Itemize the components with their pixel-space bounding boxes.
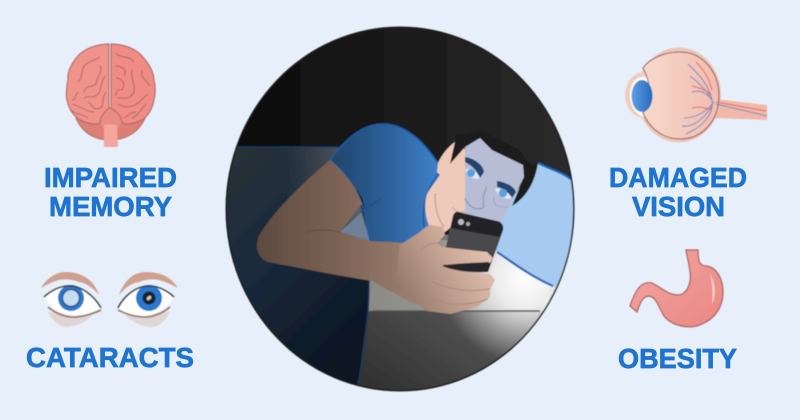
right pupil	[142, 292, 156, 304]
retina veins red	[692, 62, 766, 111]
collar neck edge	[423, 172, 440, 228]
brain stem	[104, 124, 118, 147]
right eyebrow	[497, 181, 516, 198]
heading: impaired memory	[44, 162, 177, 222]
gap under arm	[340, 213, 370, 241]
left hemisphere	[66, 44, 109, 124]
blanket edge	[232, 147, 369, 384]
right iris	[499, 189, 507, 197]
neck and pink face side	[425, 142, 466, 232]
upper sheet above crease	[369, 240, 549, 311]
pillow border	[497, 163, 572, 286]
icon: cataract eyes	[41, 272, 178, 327]
icon: eye anatomy	[625, 48, 767, 142]
icon: brain	[66, 44, 155, 147]
sclera outer	[637, 48, 721, 142]
pillow	[495, 164, 574, 288]
lens	[632, 80, 652, 112]
heading: damaged vision: VISION	[632, 191, 725, 222]
arm	[256, 160, 419, 305]
hair front	[450, 130, 538, 206]
right lower lid line	[118, 307, 170, 317]
cornea outer	[625, 72, 663, 118]
sheet glow	[452, 250, 564, 356]
shirt collar line	[330, 124, 438, 163]
right eye	[495, 188, 512, 199]
right upper lid line	[118, 286, 174, 308]
dark wall	[238, 62, 570, 176]
inner elbow crease	[306, 230, 340, 232]
phone	[442, 212, 503, 272]
phone middle band	[446, 228, 500, 257]
smile line	[452, 207, 465, 212]
cheek line	[494, 197, 508, 207]
hand over phone	[395, 225, 495, 314]
heading: cataracts: CATARACTS	[26, 342, 194, 373]
optic nerve	[715, 99, 767, 120]
left eye white	[44, 286, 101, 316]
heading: obesity: OBESITY	[618, 343, 737, 374]
eyeball interior	[643, 52, 719, 139]
right lower lid	[125, 312, 170, 327]
central illustration: man using phone in bed	[220, 20, 580, 400]
sleeve edge	[330, 160, 370, 241]
left iris	[467, 169, 475, 177]
stomach highlight	[710, 274, 715, 304]
heading: damaged vision: DAMAGED	[609, 162, 747, 193]
left eyebrow	[465, 157, 484, 178]
blanket	[224, 147, 369, 400]
sleeve seam	[360, 199, 381, 212]
left lower lid	[48, 312, 93, 327]
right hemisphere	[111, 44, 155, 124]
left brow	[41, 272, 99, 295]
right iris	[136, 285, 162, 311]
left eye	[465, 169, 480, 179]
finger creases	[421, 243, 490, 304]
retina veins blue	[682, 64, 767, 134]
blanket lit area	[285, 147, 368, 233]
shirt	[330, 124, 446, 246]
cerebellum	[76, 108, 145, 140]
nose	[465, 187, 487, 209]
heading: damaged vision	[609, 162, 747, 222]
icon: stomach	[630, 250, 723, 327]
center wedge	[100, 108, 122, 128]
jaw line	[435, 193, 444, 227]
mattress crease	[372, 310, 540, 312]
left clouded lens	[62, 290, 80, 306]
cornea white	[630, 77, 657, 117]
left upper lid line	[44, 286, 101, 308]
right cataract spot	[146, 295, 152, 301]
cortex folds	[70, 54, 150, 118]
right brow	[119, 272, 178, 295]
lavender face side	[465, 137, 524, 224]
heading: impaired memory: IMPAIRED	[44, 162, 177, 193]
camera lenses	[458, 219, 464, 225]
heading: impaired memory: MEMORY	[49, 191, 172, 222]
left lower lid line	[48, 307, 101, 317]
phone lower band	[442, 262, 489, 272]
left iris	[58, 285, 84, 311]
right eye white	[118, 286, 174, 316]
bed sheet	[350, 235, 580, 400]
